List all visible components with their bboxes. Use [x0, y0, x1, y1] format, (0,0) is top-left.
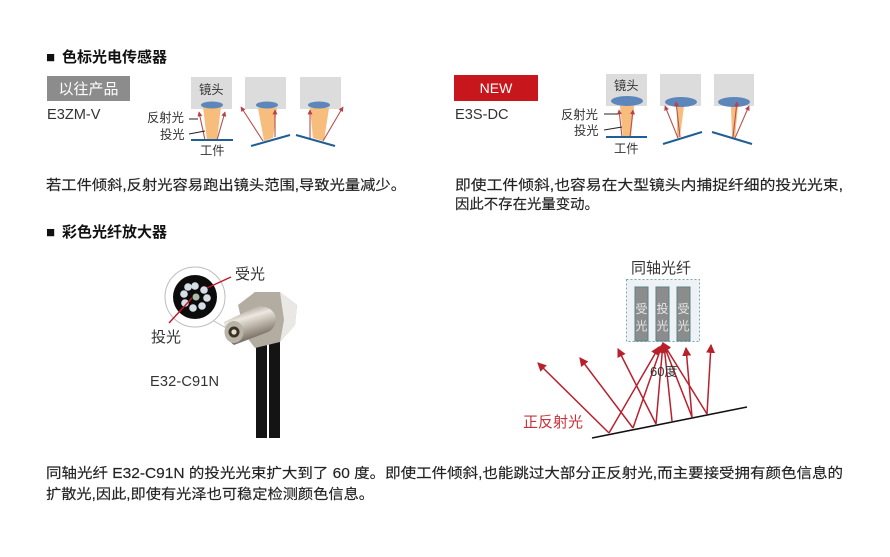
diagram: workpiece tilted right, large lens captures light — [660, 74, 702, 144]
cables — [256, 340, 280, 438]
diagram: level workpiece, standard lens — [147, 77, 233, 158]
diagram: level workpiece, large lens: 投光 — [574, 123, 599, 138]
connector body — [224, 292, 297, 348]
model name: E32-C91N: E32-C91N — [150, 374, 219, 390]
diagram: level workpiece, large lens: 反射光 — [561, 107, 598, 122]
badge: previous product: 以往产品 — [58, 81, 119, 98]
badge: NEW — [454, 75, 538, 101]
text: fibre description — [46, 465, 843, 503]
diagram: level workpiece, standard lens: 工件 — [200, 144, 225, 158]
diagram: level workpiece, standard lens: 投光 — [160, 127, 185, 142]
fibre bundle: 光 — [635, 319, 648, 333]
diagram: level workpiece, large lens: 镜头 — [614, 78, 639, 93]
fibre bundle — [626, 280, 700, 342]
diagram: level workpiece, standard lens: 镜头 — [199, 82, 224, 97]
text: fibre description: 扩散光,因此,即使有光泽也可稳定检测颜色信息。 — [46, 486, 374, 503]
model name: E3ZM-V: E3ZM-V — [47, 107, 101, 123]
diagram: workpiece tilted right, light escapes lens — [241, 77, 290, 146]
heading: colour fibre amplifier: 彩色光纤放大器 — [62, 223, 167, 241]
text: new product description — [455, 176, 843, 213]
reflected rays — [538, 343, 711, 433]
diagram: coaxial fibre 60 degree projection — [523, 260, 747, 438]
label: specular reflection: 正反射光 — [523, 414, 583, 431]
diagram: level workpiece, large lens — [561, 74, 647, 156]
label: projecting light — [151, 298, 192, 346]
badge: NEW: NEW — [480, 80, 513, 96]
heading: colour fibre amplifier: ■ — [46, 224, 55, 241]
heading: colour sensor: 色标光电传感器 — [62, 48, 167, 66]
text: new product description: 因此不存在光量变动。 — [455, 196, 599, 213]
panel: new product — [454, 74, 754, 156]
label: 60 degrees: 60度 — [650, 364, 677, 379]
text: new product description: 即使工件倾斜,也容易在大型镜头内捕捉纤细的投光光束, — [455, 176, 843, 194]
fibre bundle: 投 — [656, 301, 669, 316]
fibre bundle: 受 — [677, 302, 690, 316]
fibre bundle: 光 — [677, 319, 690, 333]
heading: colour sensor: ■ — [46, 49, 55, 66]
badge: previous product — [47, 76, 130, 101]
text: fibre description: 同轴光纤 E32-C91N 的投光光束扩大到了 60 度。即使工件倾斜,也能跳过大部分正反射光,而主要接受拥有颜色信息的 — [46, 465, 843, 482]
fibre bundle: 受 — [635, 302, 648, 316]
diagram: level workpiece, large lens: 工件 — [614, 142, 639, 156]
label: receiving light: 受光 — [235, 266, 265, 283]
magnified fibre cross-section — [165, 267, 228, 329]
photo: fibre head E32-C91N — [150, 266, 297, 438]
model name: E3S-DC: E3S-DC — [455, 107, 509, 123]
fibre bundle: 光 — [656, 319, 669, 333]
label: receiving light — [207, 266, 265, 288]
label: coaxial fibre: 同轴光纤 — [631, 260, 691, 277]
diagram: level workpiece, standard lens: 反射光 — [147, 110, 184, 125]
diagram: workpiece tilted left, large lens captures light — [712, 74, 754, 144]
text: previous product description: 若工件倾斜,反射光容易跑出镜头范围,导致光量减少。 — [46, 176, 406, 194]
workpiece surface — [592, 407, 747, 438]
label: projecting light: 投光 — [151, 329, 181, 346]
diagram: workpiece tilted left, light escapes lens — [296, 77, 343, 146]
panel: previous product — [47, 76, 343, 158]
